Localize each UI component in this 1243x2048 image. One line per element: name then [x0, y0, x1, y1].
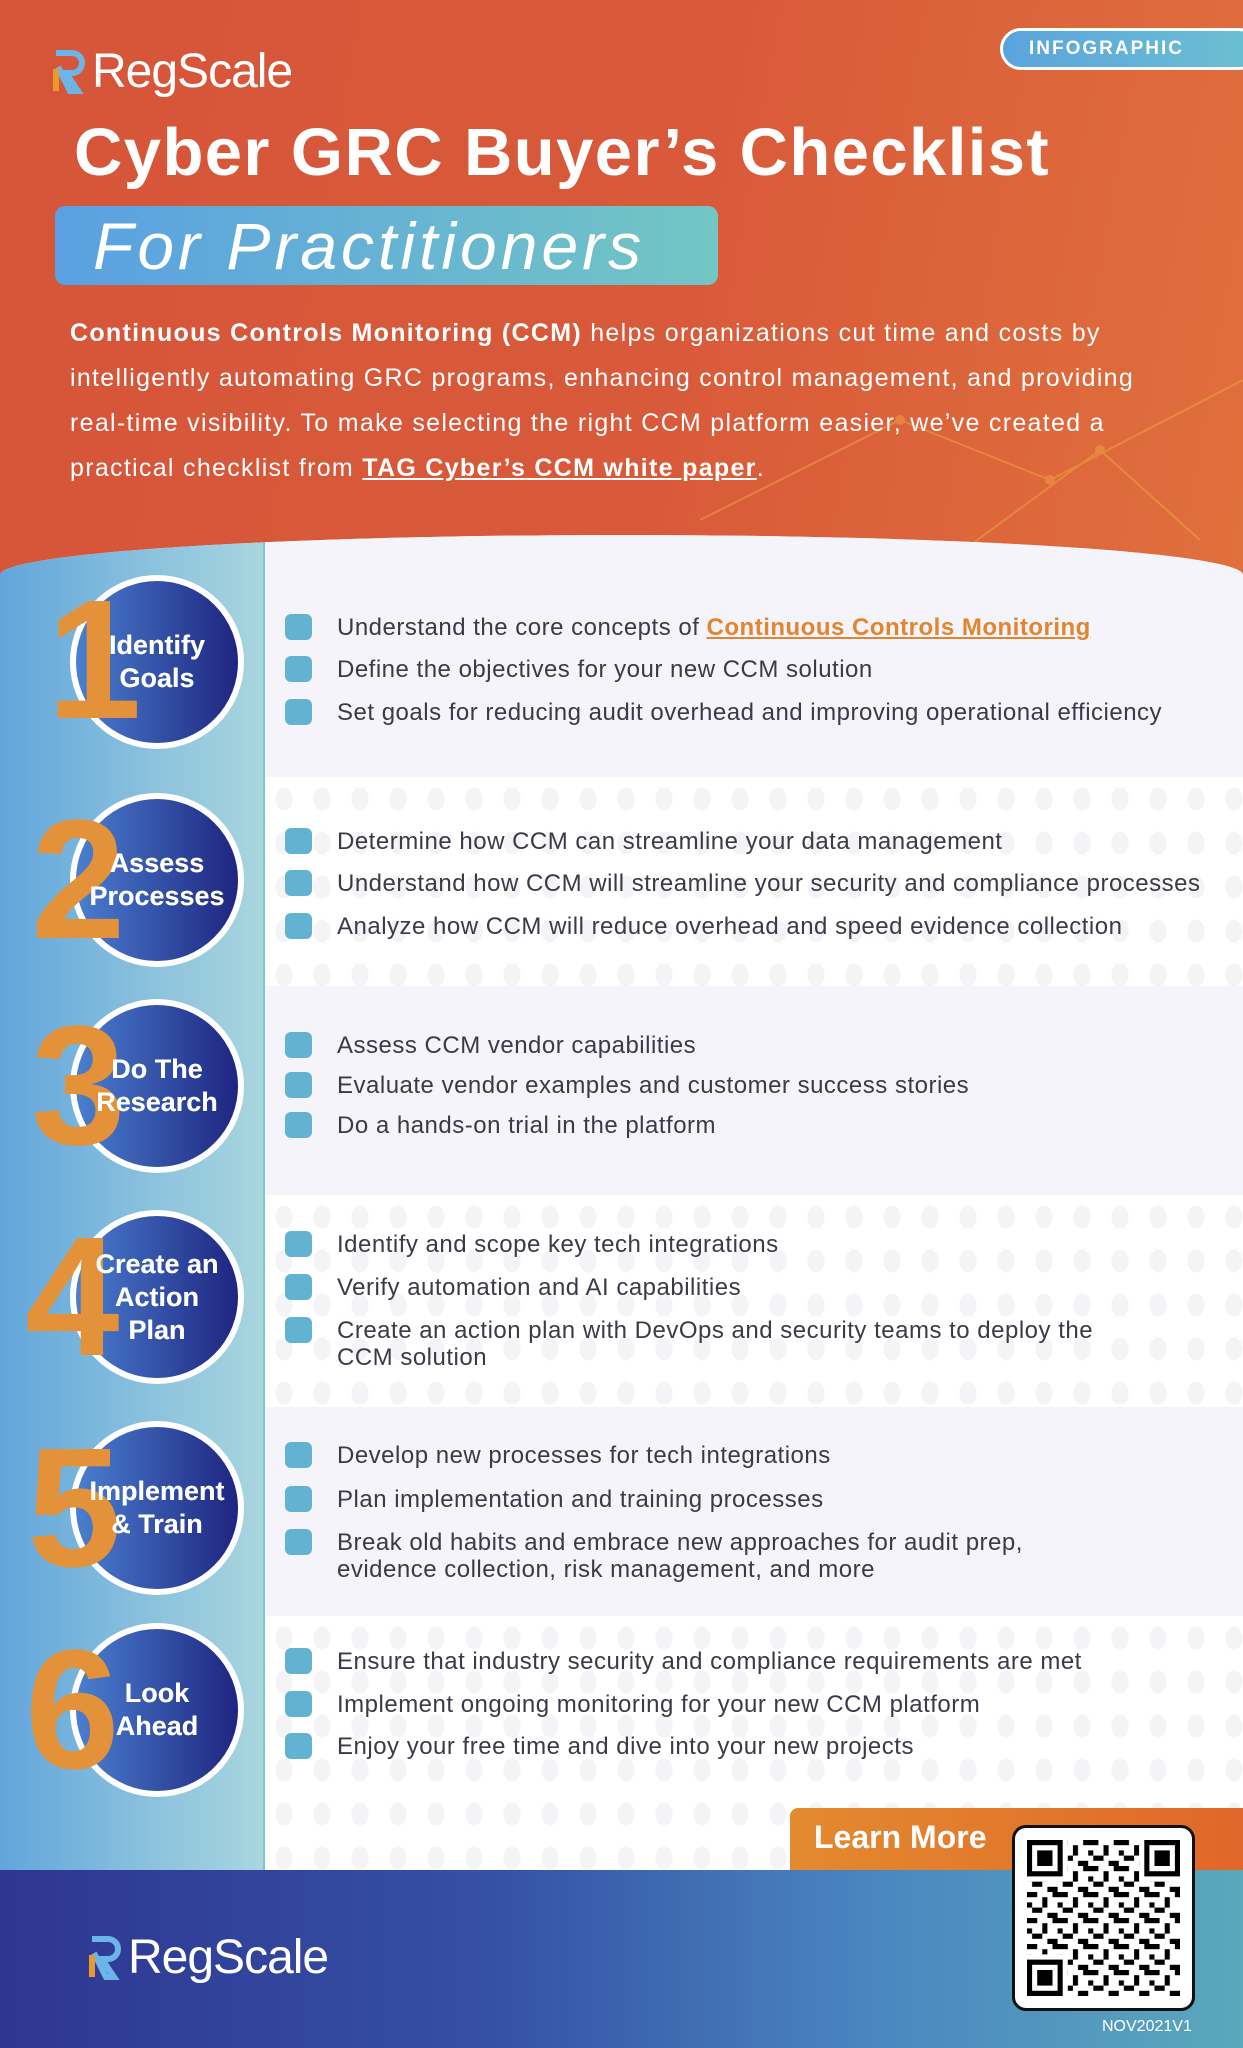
- step 3 checklist: Assess CCM vendor capabilities: [337, 1032, 696, 1059]
- step 3 checklist: [285, 1032, 969, 1139]
- step 4: Create an Action Plan: [25, 1202, 244, 1392]
- Learn More bar: Learn More: [814, 1819, 986, 1855]
- step 4 checklist: [285, 1231, 1093, 1371]
- checklist panel: [0, 535, 1243, 1870]
- step 1: Identify Goals: Identify: [109, 630, 205, 660]
- step 2: Assess Processes: Assess: [110, 848, 204, 878]
- Learn More bar: [790, 1808, 1243, 1870]
- version code: NOV2021V1: [1102, 2018, 1192, 2035]
- subtitle box: For Practitioners: [93, 209, 645, 283]
- step 3 checklist: Do a hands-on trial in the platform: [337, 1112, 716, 1139]
- step 1: Identify Goals: [47, 565, 244, 755]
- step 1: Identify Goals: Identify: [109, 630, 205, 660]
- step 3: Do The Research: Do The: [111, 1054, 203, 1084]
- step 6 checklist: Ensure that industry security and compliance requirements are met: [337, 1648, 1082, 1675]
- step 1 checklist: Define the objectives for your new CCM solution: [337, 656, 873, 683]
- step 5 checklist: Develop new processes for tech integrations: [337, 1442, 831, 1469]
- logo: RegScale: RegScale: [92, 45, 292, 98]
- step 3: Do The Research: [31, 991, 244, 1181]
- step 4: Create an Action Plan: Plan: [128, 1314, 186, 1344]
- step 5: Implement & Train: Implement: [89, 1476, 225, 1506]
- step 5: Implement & Train: & Train: [111, 1509, 203, 1539]
- step 6: Look Ahead: Look: [125, 1678, 189, 1708]
- intro paragraph: real-time visibility. To make selecting the right CCM platform easier, we’ve created a: [70, 409, 1105, 437]
- step 5 checklist: Plan implementation and training processes: [337, 1486, 824, 1513]
- step 3: Do The Research: Research: [96, 1087, 218, 1117]
- badge: INFOGRAPHIC: [1000, 28, 1243, 70]
- step 5 checklist: [285, 1442, 1023, 1583]
- step 3: Do The Research: 3: [31, 991, 126, 1181]
- step 1 checklist: [285, 614, 1162, 726]
- intro paragraph: intelligently automating GRC programs, enhancing control management, and providing: [70, 364, 1134, 392]
- step 5: Implement & Train: [27, 1413, 244, 1603]
- footer logo: RegScale: RegScale: [128, 1931, 328, 1984]
- step 3: Do The Research: Do The: [111, 1054, 203, 1084]
- intro paragraph: practical checklist from TAG Cyber’s CCM white paper.: [70, 454, 765, 482]
- step 4: Create an Action Plan: Action: [115, 1282, 199, 1312]
- step 6 checklist: [285, 1648, 1082, 1760]
- step 4 checklist: Verify automation and AI capabilities: [337, 1274, 741, 1301]
- step 4 checklist: Identify and scope key tech integrations: [337, 1231, 779, 1258]
- step 4: Create an Action Plan: Create an: [95, 1248, 219, 1278]
- step 2: Assess Processes: Processes: [89, 881, 225, 911]
- step 6 checklist: Enjoy your free time and dive into your new projects: [337, 1733, 914, 1760]
- step 2 checklist: Analyze how CCM will reduce overhead and speed evidence collection: [337, 913, 1122, 940]
- step 2 checklist: [285, 828, 1201, 940]
- step 2: Assess Processes: Assess: [110, 848, 204, 878]
- QR code: [1012, 1825, 1195, 2011]
- step 6: Look Ahead: Ahead: [116, 1711, 198, 1741]
- step 5: Implement & Train: & Train: [111, 1509, 203, 1539]
- step 2 checklist: Understand how CCM will streamline your security and compliance processes: [337, 870, 1201, 897]
- step 3 checklist: Evaluate vendor examples and customer success stories: [337, 1072, 969, 1099]
- step 4 checklist: Create an action plan with DevOps and security teams to deploy the: [337, 1317, 1093, 1344]
- step 1 checklist: Understand the core concepts of Continuous Controls Monitoring: [337, 614, 1091, 641]
- intro paragraph: [70, 319, 1134, 482]
- step 1: Identify Goals: 1: [47, 565, 142, 755]
- step 4: Create an Action Plan: Plan: [128, 1314, 186, 1344]
- header background: [0, 0, 1243, 600]
- step 1: Identify Goals: Goals: [119, 663, 194, 693]
- step 1 checklist: Set goals for reducing audit overhead and improving operational efficiency: [337, 699, 1162, 726]
- step 6: Look Ahead: Look: [125, 1678, 189, 1708]
- badge: INFOGRAPHIC: INFOGRAPHIC: [1029, 38, 1184, 59]
- step 3: Do The Research: Research: [96, 1087, 218, 1117]
- step 2 checklist: Determine how CCM can streamline your data management: [337, 828, 1002, 855]
- step 5: Implement & Train: Implement: [89, 1476, 225, 1506]
- step 4: Create an Action Plan: 4: [25, 1202, 120, 1392]
- step 6: Look Ahead: 6: [25, 1615, 120, 1805]
- step 6 checklist: Implement ongoing monitoring for your new CCM platform: [337, 1691, 980, 1718]
- step 5: Implement & Train: 5: [27, 1413, 122, 1603]
- step 2: Assess Processes: 2: [31, 785, 126, 975]
- step 4: Create an Action Plan: Create an: [95, 1248, 219, 1278]
- step 4 checklist: CCM solution: [337, 1344, 487, 1371]
- footer: [0, 1870, 1243, 2048]
- step 1: Identify Goals: Goals: [119, 663, 194, 693]
- title: Cyber GRC Buyer’s Checklist: [74, 115, 1050, 190]
- intro paragraph: Continuous Controls Monitoring (CCM) helps organizations cut time and costs by: [70, 319, 1101, 347]
- step 2: Assess Processes: [31, 785, 244, 975]
- step 6: Look Ahead: [25, 1615, 244, 1805]
- step 4: Create an Action Plan: Action: [115, 1282, 199, 1312]
- step 5 checklist: evidence collection, risk management, and more: [337, 1556, 875, 1583]
- step 6: Look Ahead: Ahead: [116, 1711, 198, 1741]
- step 2: Assess Processes: Processes: [89, 881, 225, 911]
- step 5 checklist: Break old habits and embrace new approaches for audit prep,: [337, 1529, 1023, 1556]
